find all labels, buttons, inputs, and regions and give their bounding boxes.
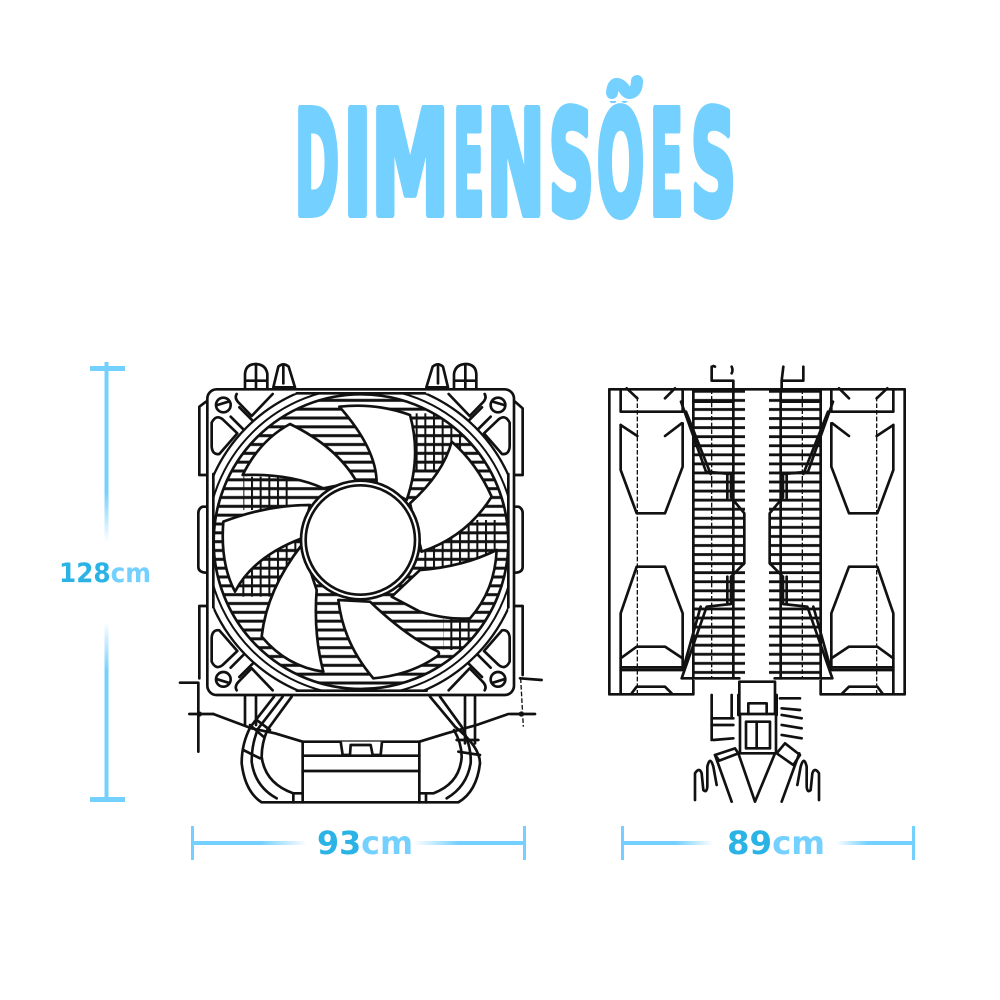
title: Õ xyxy=(597,80,644,248)
front view: cooler with fan xyxy=(180,364,542,802)
dimension: width 93cm xyxy=(191,824,526,862)
pipes and base xyxy=(180,678,542,802)
left half xyxy=(609,388,745,694)
side clips xyxy=(198,402,523,678)
fan blades xyxy=(223,406,497,678)
dimension: depth 89cm: 89cm xyxy=(727,824,825,862)
title: M xyxy=(371,80,449,248)
fan hub xyxy=(301,481,420,599)
fan ring inner edge xyxy=(214,394,508,689)
text: S xyxy=(691,80,736,248)
fan frame xyxy=(207,389,514,695)
side view: cooler profile xyxy=(609,366,905,802)
right half xyxy=(769,388,905,694)
dimension: height 128cm xyxy=(59,362,151,802)
title: N xyxy=(487,80,545,248)
title: D xyxy=(295,80,339,248)
title: E xyxy=(650,80,683,248)
fins behind fan xyxy=(213,393,513,693)
dimension: depth 89cm xyxy=(621,824,915,862)
top line and pipes xyxy=(609,366,905,389)
title: I xyxy=(343,80,372,248)
mounting bracket and lower pipes xyxy=(712,682,802,802)
ring edges xyxy=(213,393,508,691)
fan ring outer band xyxy=(213,393,508,691)
springs xyxy=(695,761,819,800)
title: S xyxy=(549,80,594,248)
dimension: height 128cm: 128cm xyxy=(59,558,151,589)
title: E xyxy=(453,80,484,248)
dimension: width 93cm: 93cm xyxy=(317,824,413,862)
title xyxy=(298,75,734,220)
heatpipe caps xyxy=(245,364,476,389)
